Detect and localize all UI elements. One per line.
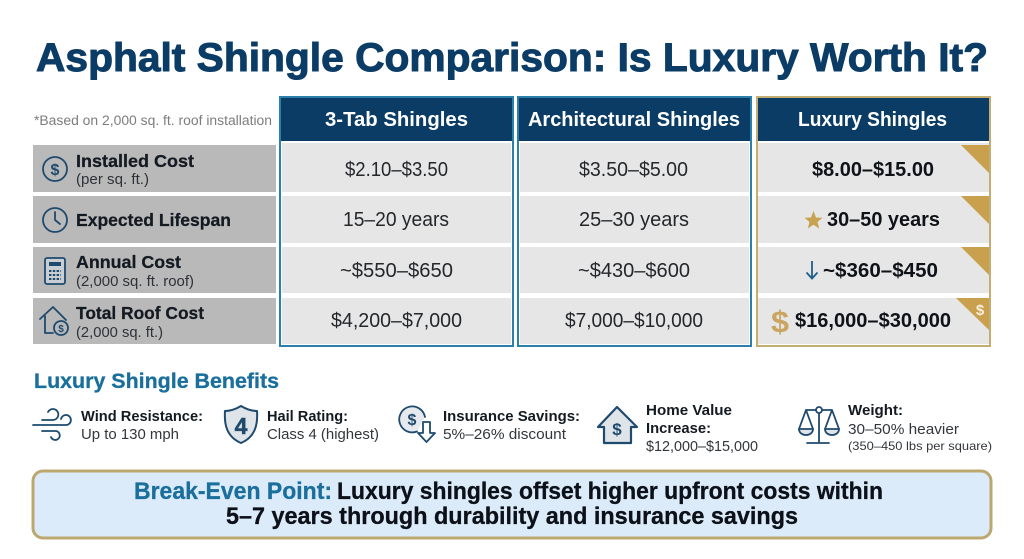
value: installed cost: $2.10–$3.50 — [345, 159, 448, 181]
column header: architectural: Architectural Shingles — [528, 109, 740, 131]
row label: annual cost: (2,000 sq. ft. roof) — [76, 274, 194, 290]
icon: calculator — [45, 258, 65, 284]
benefit: wind resistance: Up to 130 mph — [81, 426, 179, 443]
icon: dollar circle: $ — [51, 162, 60, 179]
value: lifespan: 25–30 years — [579, 209, 689, 231]
icon: house dollar: $ — [612, 420, 622, 439]
benefit: insurance savings: 5%–26% discount — [443, 426, 567, 443]
value: annual cost with arrow: ~$360–$450 — [823, 260, 938, 282]
benefit: hail rating — [225, 406, 379, 443]
icon: dollar with down arrow: $ — [408, 412, 417, 429]
column header: 3-tab — [281, 98, 512, 141]
value: total cost: $7,000–$10,000 — [565, 310, 703, 332]
row label: installed cost: Installed Cost — [76, 151, 194, 171]
benefit: insurance savings: Insurance Savings: — [443, 408, 580, 425]
benefit: home value increase: $12,000–$15,000 — [646, 438, 758, 455]
benefit: weight — [799, 402, 992, 453]
panel: architectural shingles column — [518, 97, 751, 346]
row label: annual cost: Annual Cost — [76, 252, 181, 272]
benefit: home value increase: Home Value — [646, 402, 732, 419]
row label: expected lifespan: Expected Lifespan — [76, 210, 231, 230]
column header: 3-tab: 3-Tab Shingles — [325, 109, 468, 131]
benefit: home value increase: Increase: — [646, 420, 711, 437]
benefit: wind resistance: Wind Resistance: — [81, 408, 203, 425]
icon: house with dollar: $ — [58, 324, 64, 335]
row label: total roof cost — [33, 298, 276, 344]
value: lifespan with star: 30–50 years — [827, 209, 940, 231]
value: annual cost: ~$430–$600 — [578, 260, 690, 282]
column header: luxury — [758, 98, 989, 141]
benefit: weight: Weight: — [848, 402, 903, 419]
row label: total roof cost: (2,000 sq. ft.) — [76, 325, 163, 341]
benefit: wind resistance — [33, 408, 203, 443]
icon: shield 4: 4 — [235, 413, 248, 439]
row label: expected lifespan — [33, 196, 276, 243]
value: total cost: $4,200–$7,000 — [331, 310, 462, 332]
row label: installed cost — [33, 145, 276, 192]
row label: total roof cost: Total Roof Cost — [76, 303, 204, 323]
footnote: *Based on 2,000 sq. ft. roof installation — [34, 113, 272, 128]
value: total cost with dollar — [771, 304, 951, 339]
panel: luxury shingles column — [757, 97, 990, 346]
icon: dollar with down arrow — [399, 406, 435, 442]
value: total cost with dollar: $ — [771, 304, 789, 339]
corner badge: dollar — [956, 298, 989, 330]
benefit: hail rating: Hail Rating: — [267, 408, 348, 425]
value: installed cost: $8.00–$15.00 — [812, 159, 934, 181]
value: installed cost: $3.50–$5.00 — [579, 159, 688, 181]
value: total cost with dollar: $16,000–$30,000 — [795, 310, 951, 332]
benefit: weight: (350–450 lbs per square) — [848, 439, 992, 453]
heading: luxury shingle benefits: Luxury Shingle Benefits — [34, 370, 279, 393]
icon: shield 4 — [225, 406, 257, 443]
icon: house with dollar — [40, 307, 68, 335]
benefit: hail rating: Class 4 (highest) — [267, 426, 379, 443]
value: annual cost: ~$550–$650 — [340, 260, 453, 282]
title: Asphalt Shingle Comparison: Is Luxury Worth It? — [36, 36, 988, 80]
corner badge: dollar: $ — [976, 302, 985, 319]
callout: break-even point: 5–7 years through durability and insurance savings — [226, 503, 798, 530]
panel: row labels — [33, 145, 276, 344]
value: lifespan: 15–20 years — [343, 209, 449, 231]
icon: dollar circle — [43, 157, 67, 181]
row label: installed cost: (per sq. ft.) — [76, 172, 149, 188]
panel: 3-tab shingles column — [280, 97, 513, 346]
icon: clock — [43, 208, 67, 232]
icon: wind — [33, 409, 71, 440]
callout: break-even point: Luxury shingles offset higher upfront costs within — [337, 478, 883, 505]
benefit: insurance savings — [399, 406, 580, 443]
callout: break-even point — [33, 471, 991, 538]
column header: luxury: Luxury Shingles — [798, 109, 947, 131]
benefit: home value increase — [598, 402, 758, 455]
callout: break-even point: Break-Even Point: — [134, 478, 332, 505]
icon: house dollar — [598, 407, 637, 443]
icon: scales — [799, 407, 839, 443]
column header: architectural — [519, 98, 750, 141]
benefit: weight: 30–50% heavier — [848, 421, 959, 438]
row label: annual cost — [33, 247, 276, 293]
